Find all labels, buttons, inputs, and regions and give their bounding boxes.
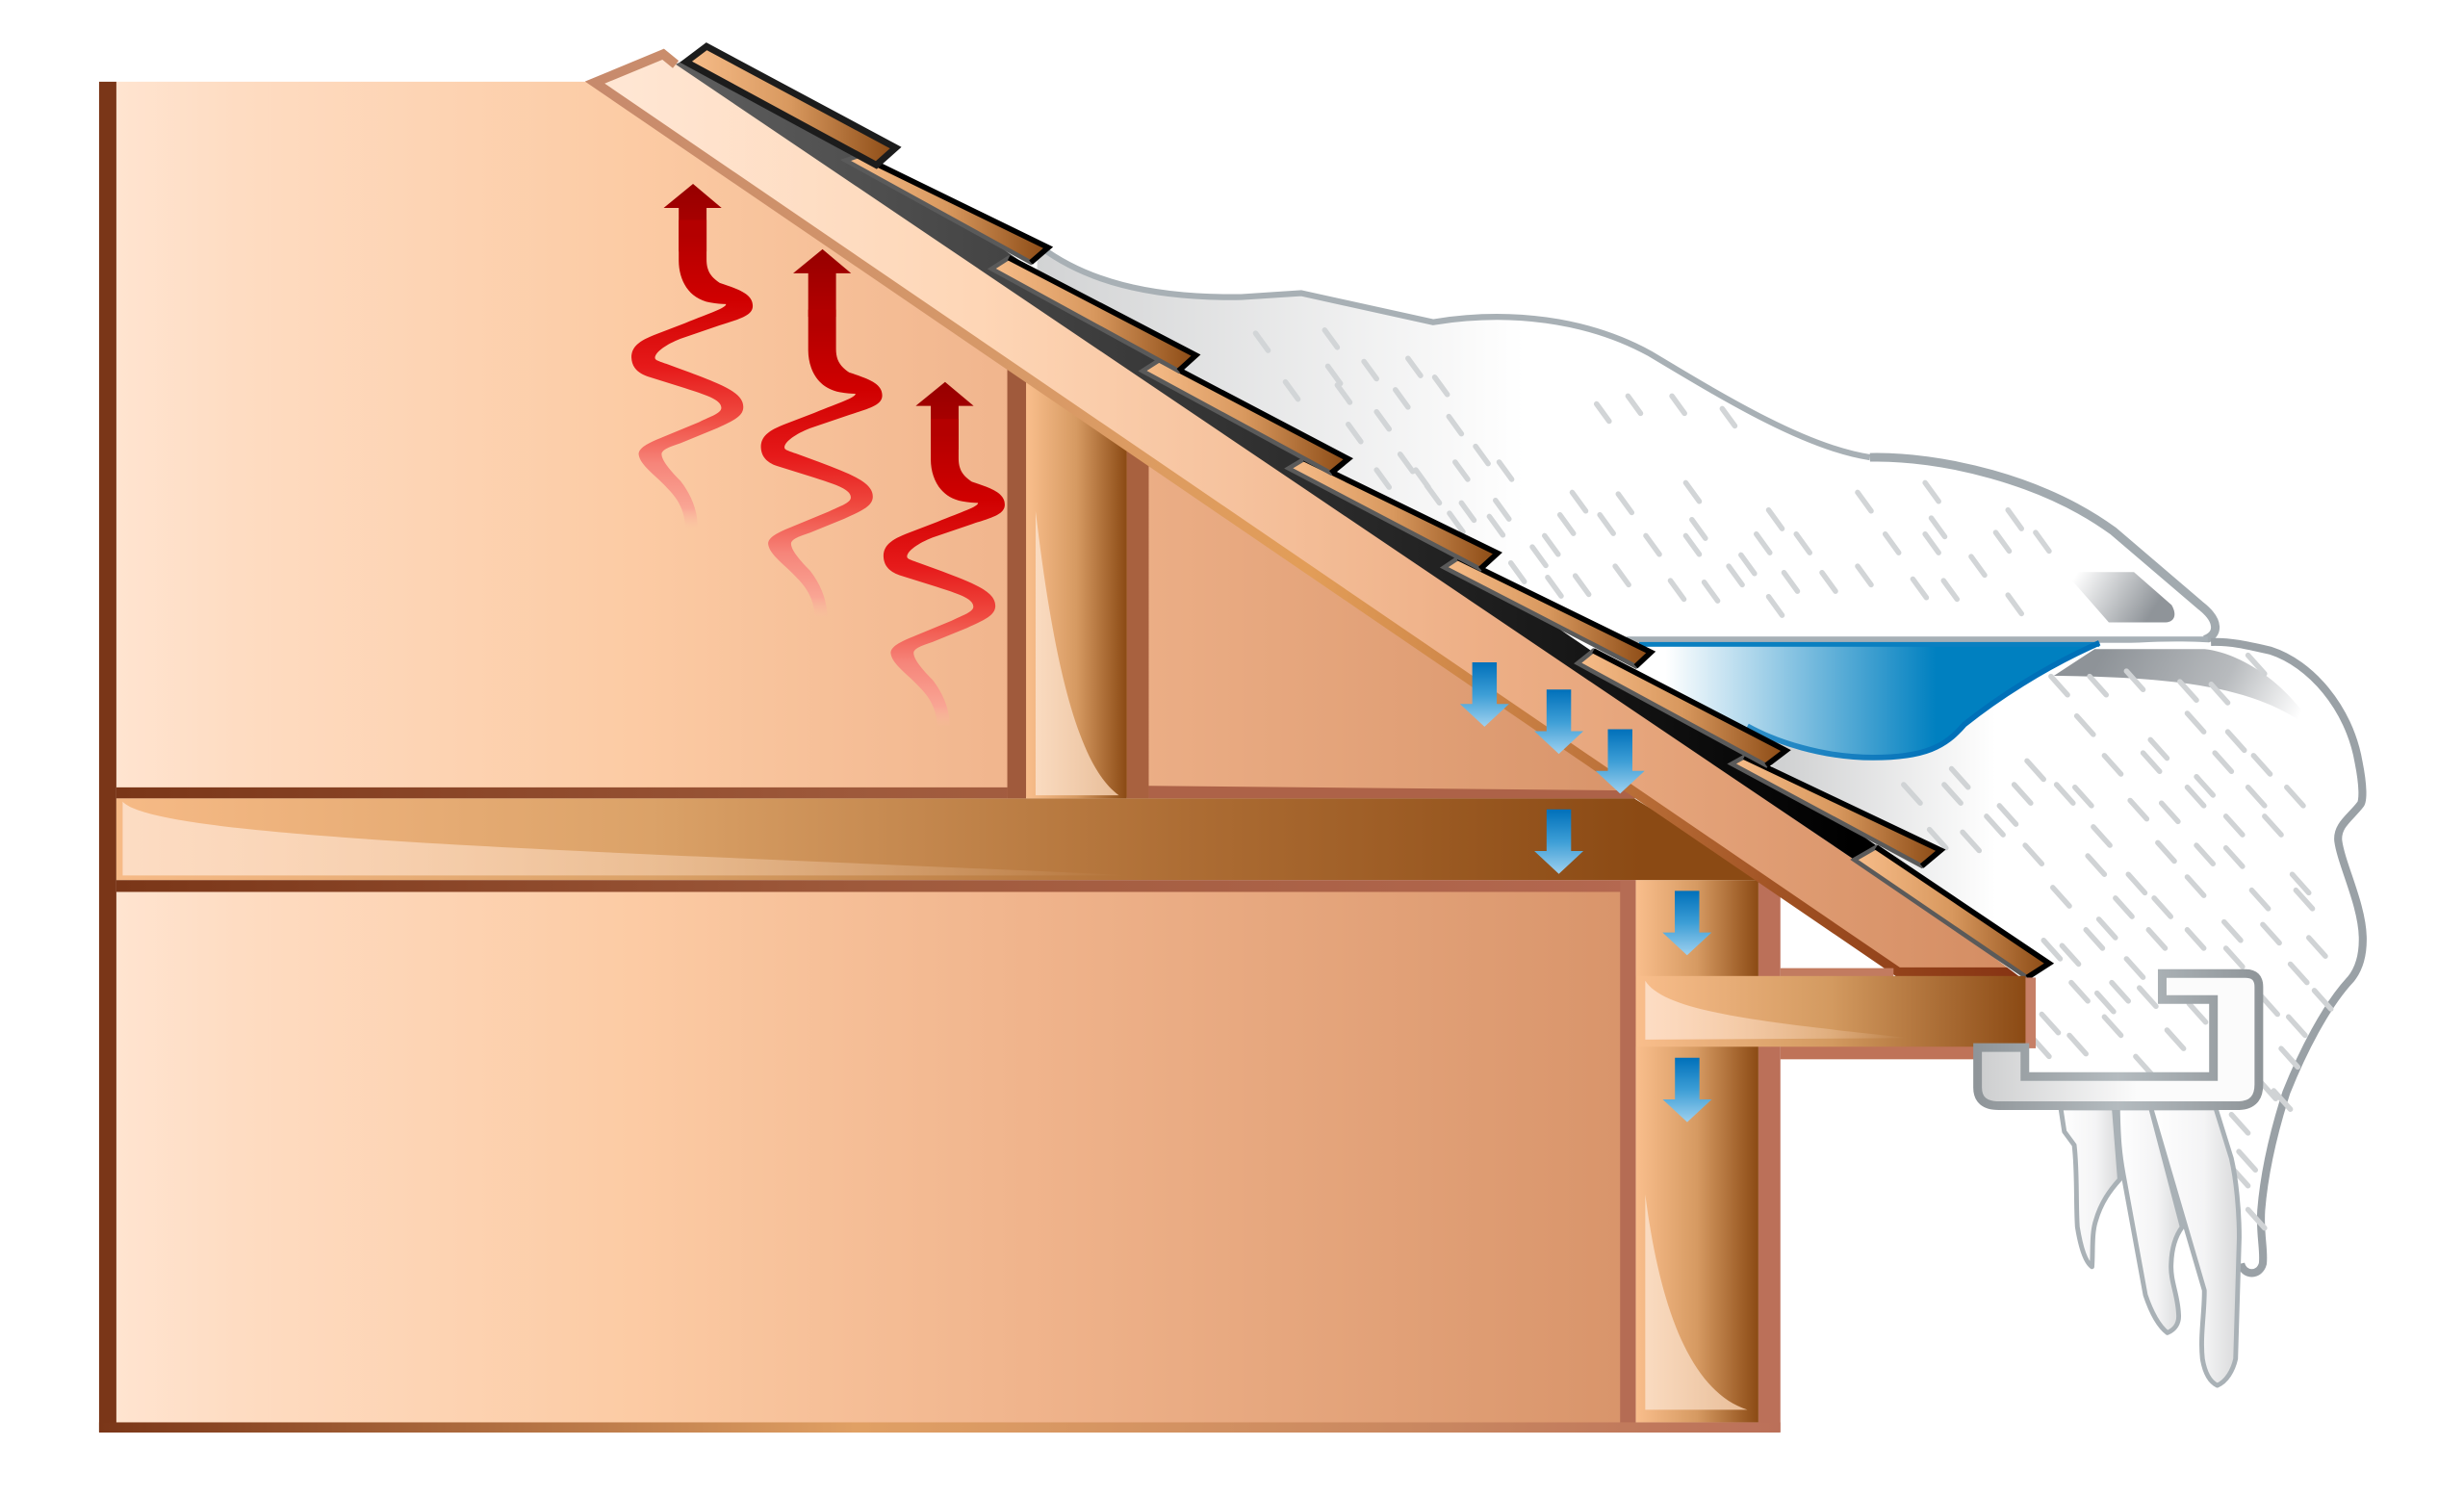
upper snow layer	[1038, 241, 2216, 668]
roof shingles	[686, 46, 2049, 977]
shingle 4	[1142, 360, 1348, 473]
ceiling joist top line	[116, 787, 1008, 798]
panel: wall stud	[1620, 877, 1781, 1432]
icicles	[2061, 1108, 2239, 1385]
rafter outline	[595, 54, 2027, 972]
lookout highlight	[1645, 981, 1910, 1040]
upper snow flecks	[1255, 330, 2049, 615]
shingle 3	[991, 258, 1195, 371]
ice dam water pool	[1619, 642, 2099, 760]
shingle 9	[1854, 847, 2049, 977]
red heat arrow 1	[631, 184, 753, 529]
blue arrow 5	[1662, 890, 1711, 955]
upper snow outline	[1040, 246, 1870, 457]
blue arrow 1	[1460, 662, 1509, 727]
shingle 1	[686, 46, 896, 165]
lower snow shadow	[2054, 649, 2315, 731]
ceiling joist top line right	[1148, 786, 1640, 798]
shingle 6	[1444, 558, 1651, 666]
pool edge	[1747, 643, 2099, 758]
blue arrow 3	[1596, 730, 1645, 793]
icicle 3	[2151, 1108, 2239, 1385]
upper snow shadow	[2065, 572, 2174, 622]
bottom framing line	[99, 1422, 1781, 1432]
pool top edge	[1639, 642, 2099, 647]
shingle 2	[845, 156, 1048, 263]
red heat arrow 3	[884, 382, 1005, 727]
roof rafter	[594, 54, 2027, 977]
red heat arrow 2	[761, 249, 883, 618]
blue arrow 2	[1534, 689, 1583, 754]
panel: lower room	[116, 888, 1622, 1424]
lower snow layer	[1768, 641, 2363, 1273]
lower snow outline	[2211, 642, 2363, 1273]
exterior wall framing line	[99, 82, 116, 1432]
blue arrow 6	[1662, 1058, 1711, 1123]
ceiling joist bottom line	[116, 880, 1634, 891]
roof lookout framing	[1636, 968, 2036, 1059]
roof underlayment	[676, 47, 2049, 977]
lower snow flecks	[1904, 656, 2331, 1228]
beam highlight	[122, 802, 1132, 875]
icicle 2	[2118, 1108, 2182, 1332]
panel: attic space	[116, 82, 1642, 797]
shingle 8	[1732, 757, 1940, 866]
stud highlight	[1036, 511, 1118, 795]
blue arrow 4	[1534, 810, 1583, 874]
snow base line	[1627, 636, 2208, 643]
icicle 1	[2061, 1108, 2119, 1267]
stud highlight	[1645, 1195, 1747, 1409]
panel: attic stud	[1008, 363, 1148, 798]
panel: ceiling joist beam	[116, 798, 1766, 880]
gutter	[1978, 973, 2259, 1105]
shingle 7	[1578, 651, 1785, 765]
shingle 5	[1289, 459, 1498, 569]
upper snow outline right	[1870, 457, 2216, 639]
